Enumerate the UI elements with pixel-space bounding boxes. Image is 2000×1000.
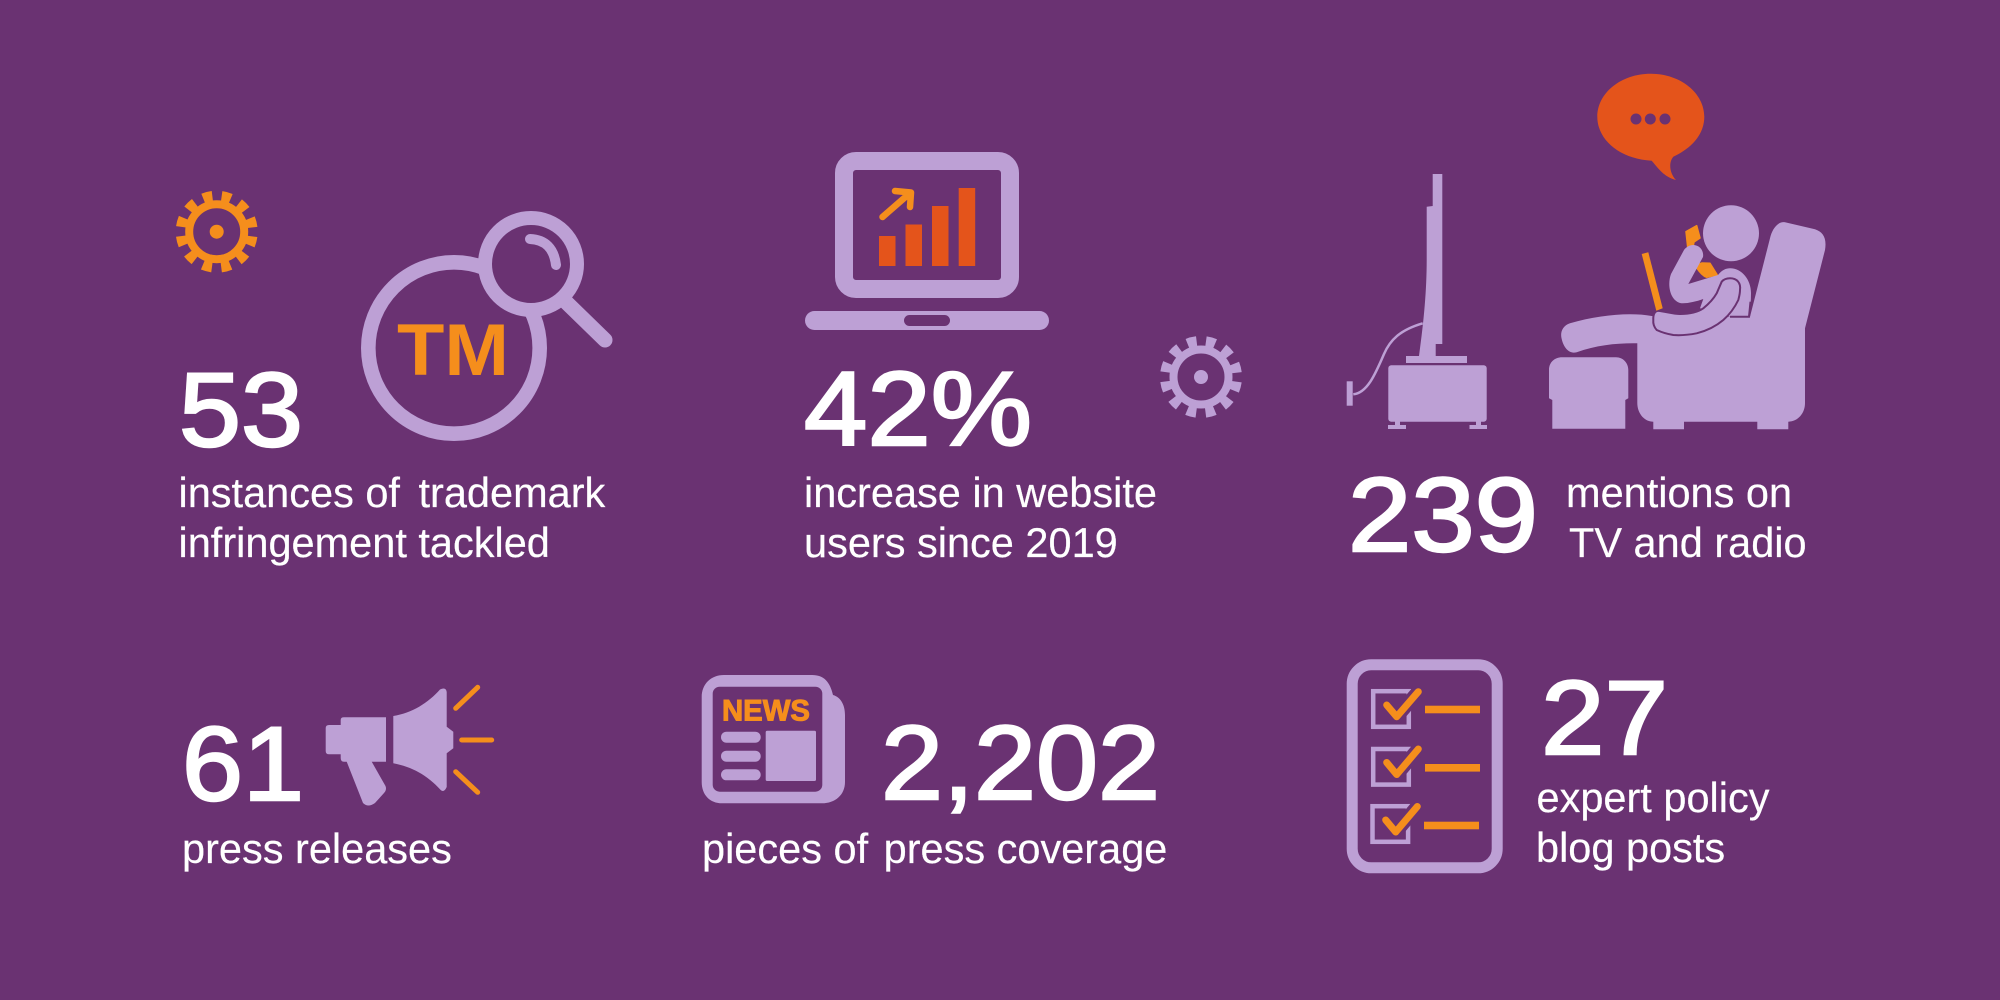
chair seam (1730, 302, 1750, 317)
icon: lilac gear (1161, 337, 1241, 417)
icon: newspaper: NEWS (722, 694, 810, 728)
ottoman (1549, 357, 1628, 429)
icon: magnifying glass over TM circle: TM (397, 310, 509, 391)
icon: megaphone (326, 687, 492, 806)
stat label: press coverage: pieces of press coverage (702, 825, 1167, 872)
laptop screen (1642, 252, 1663, 311)
icon: magnifying glass over TM circle (368, 218, 605, 434)
icon: newspaper (702, 675, 845, 803)
torso and raised forearm (1669, 245, 1751, 317)
stat number: 53: 53 (179, 352, 303, 469)
stat label: trademark: infringement tackled (178, 519, 550, 566)
armchair and legs (1561, 222, 1826, 429)
resting arm (1653, 278, 1740, 335)
panel: policy blog posts (1352, 660, 1770, 871)
panel: press releases (182, 687, 492, 872)
panel: TV and radio mentions (1347, 74, 1826, 574)
stat label: press releases: press releases (182, 825, 452, 872)
head (1703, 205, 1759, 261)
stat number: 61: 61 (182, 706, 304, 823)
icon: laptop with rising bar chart (805, 161, 1049, 330)
icon: checklist clipboard (1352, 665, 1497, 868)
phone handset (1686, 226, 1717, 277)
stat label: blog posts: blog posts (1536, 824, 1725, 871)
panel: website users (804, 161, 1241, 566)
stat number: 27: 27 (1541, 660, 1668, 777)
stat label: blog posts: expert policy (1536, 774, 1769, 821)
stat label: trademark: instances of trademark (178, 469, 605, 516)
stat number: 2,202: 2,202 (881, 705, 1160, 822)
stat label: website users: increase in website (804, 469, 1157, 516)
panel: trademark infringement (177, 192, 606, 566)
panel: press coverage (702, 675, 1167, 872)
stat number: 239: 239 (1348, 457, 1538, 574)
icon: television on cabinet (1347, 174, 1487, 429)
stat number: 42%: 42% (804, 351, 1032, 468)
icon: speech bubble (1597, 74, 1704, 180)
icon: person on phone in armchair with laptop (1549, 205, 1826, 429)
icon: orange gear (177, 192, 257, 272)
stat label: TV and radio: mentions on (1566, 469, 1792, 516)
stat label: TV and radio: TV and radio (1569, 519, 1807, 566)
stat label: website users: users since 2019 (804, 519, 1118, 566)
